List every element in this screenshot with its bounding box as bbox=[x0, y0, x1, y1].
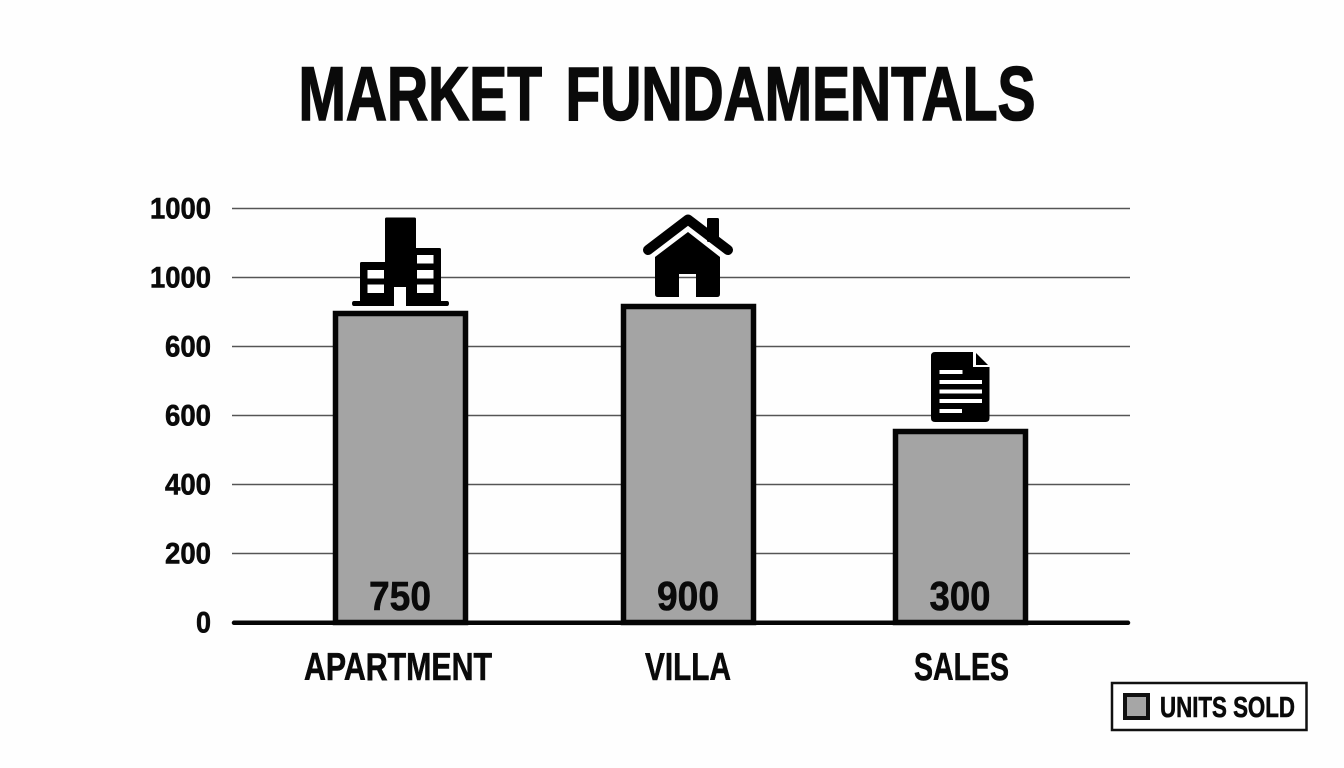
y axis labels: 200 bbox=[165, 538, 211, 570]
category label: apartment: APARTMENT bbox=[304, 646, 492, 689]
bar: apartment bbox=[336, 314, 466, 622]
title: FUNDAMENTALS bbox=[566, 52, 1036, 137]
y axis labels: 600 bbox=[165, 330, 211, 364]
bar: sales bbox=[896, 432, 1026, 622]
x axis baseline bbox=[234, 621, 1128, 625]
legend bbox=[1112, 683, 1306, 730]
y axis labels: 400 bbox=[165, 468, 211, 502]
icon: document bbox=[931, 352, 990, 422]
value: 750: 750 bbox=[369, 573, 431, 619]
y axis labels: 600 bbox=[165, 400, 211, 432]
value: 900: 900 bbox=[657, 573, 719, 619]
bar chart bbox=[150, 192, 1130, 689]
category label: villa: VILLA bbox=[645, 646, 731, 689]
y axis labels: 1000 bbox=[150, 262, 211, 294]
bar: villa bbox=[624, 306, 754, 622]
legend label: UNITS SOLD bbox=[1160, 692, 1295, 724]
value: 300: 300 bbox=[930, 573, 990, 619]
title: MARKET bbox=[298, 52, 542, 137]
legend swatch bbox=[1125, 695, 1148, 718]
y axis labels: 0 bbox=[196, 606, 211, 640]
title bbox=[298, 52, 1036, 137]
icon: apartment building bbox=[352, 218, 449, 306]
y axis labels: 1000 bbox=[150, 192, 211, 226]
category label: sales: SALES bbox=[914, 646, 1009, 689]
icon: house bbox=[648, 218, 728, 297]
y axis labels bbox=[150, 192, 211, 640]
